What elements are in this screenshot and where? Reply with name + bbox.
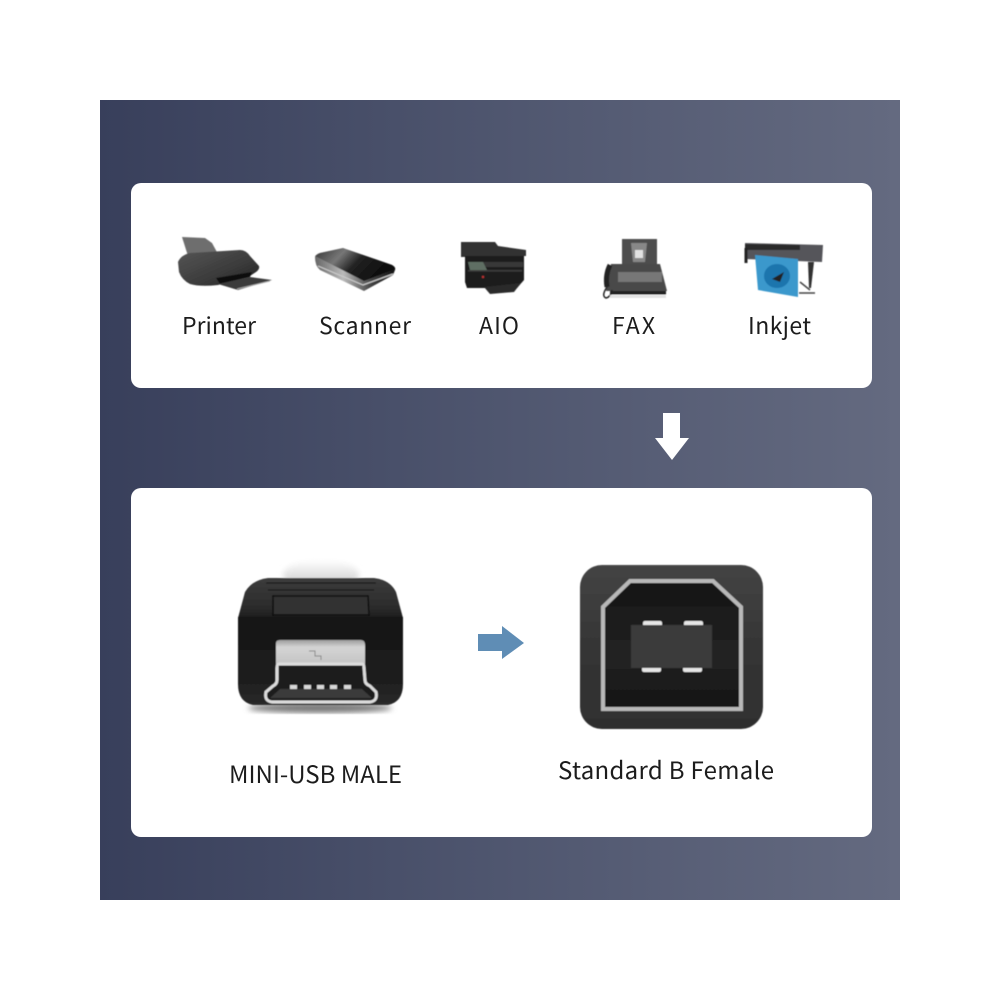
panel: devices	[131, 183, 872, 388]
icon: printer	[178, 237, 272, 290]
label: AIO: AIO	[479, 307, 519, 341]
arrow: down	[655, 413, 689, 460]
label: FAX: FAX	[612, 307, 655, 341]
background panel	[100, 100, 900, 900]
label: standard B female: Standard B Female	[558, 751, 774, 786]
label: scanner: Scanner	[319, 307, 411, 341]
arrow: right	[478, 626, 524, 659]
label: mini-USB male: MINI-USB MALE	[229, 755, 402, 790]
icon: standard B female port	[580, 565, 763, 729]
icon: scanner	[315, 248, 395, 291]
panel: connectors	[131, 488, 872, 837]
label: inkjet: Inkjet	[748, 307, 811, 341]
icon: inkjet plotter	[745, 243, 823, 297]
icon: all-in-one printer	[461, 242, 526, 294]
icon: mini-USB male connector	[238, 560, 403, 713]
icon: fax machine	[604, 239, 667, 298]
label: printer: Printer	[182, 307, 256, 341]
